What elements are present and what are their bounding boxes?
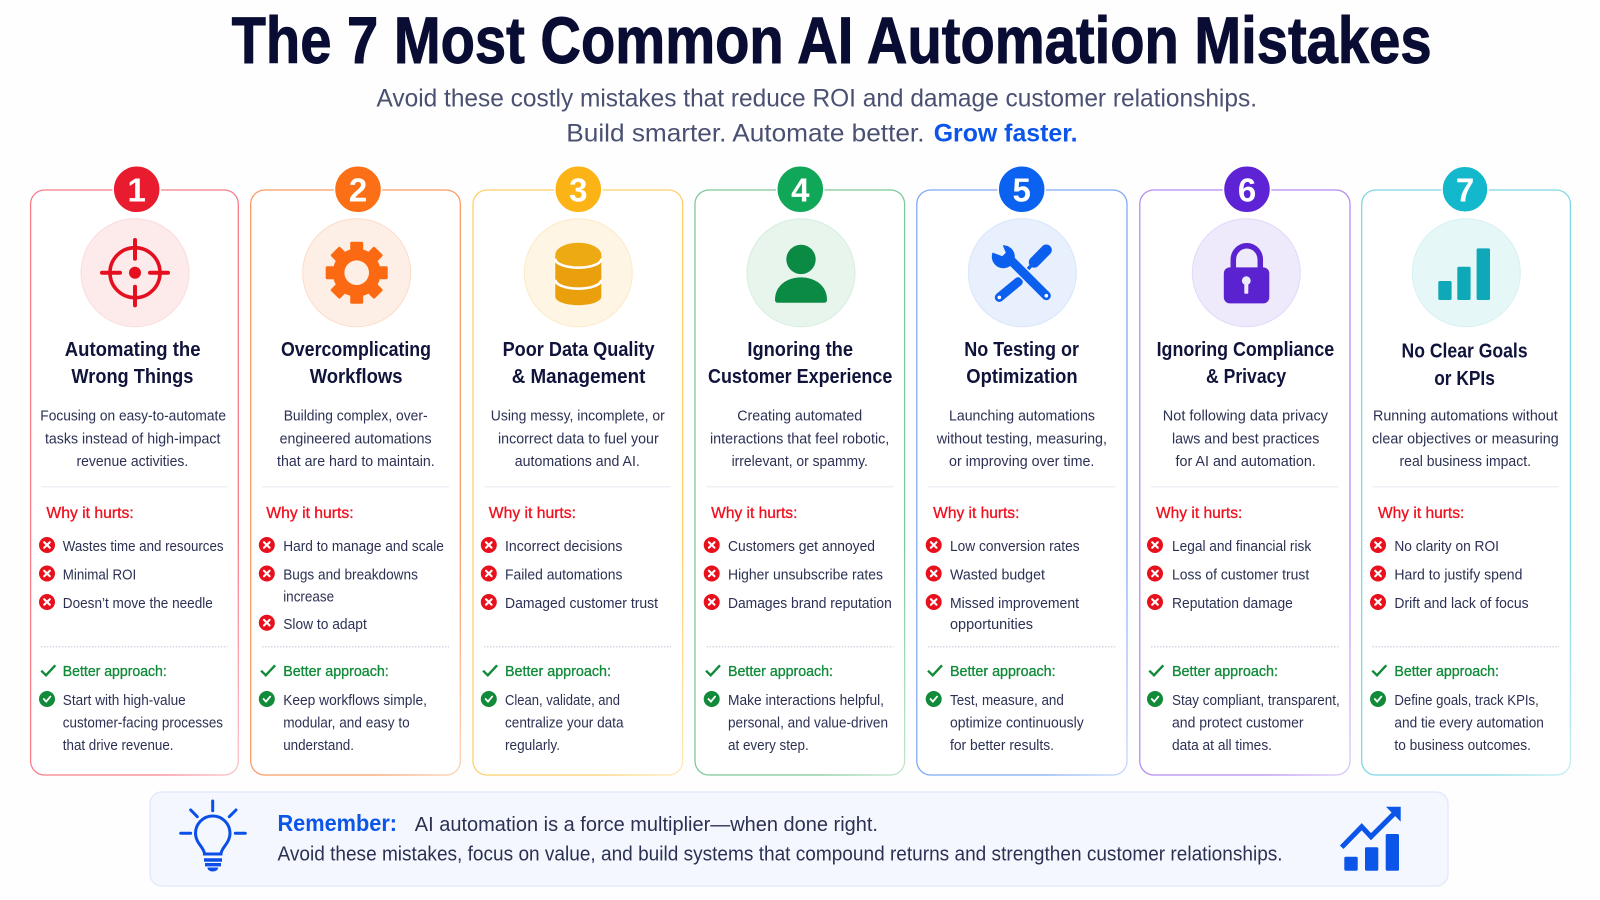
panel: card 2 overcomplicating workflows <box>251 166 460 775</box>
better approach: understand. <box>283 738 354 754</box>
panel: card 7 no clear goals or KPIs <box>1362 166 1570 775</box>
card title: Automating the <box>65 338 200 361</box>
why it hurts list: Loss of customer trust <box>1172 567 1309 583</box>
why it hurts list: No clarity on ROI <box>1394 539 1499 555</box>
subtitle: Avoid these costly mistakes that reduce ROI and damage customer relationships. <box>376 85 1257 113</box>
card border <box>917 190 1127 775</box>
number badge 2 <box>334 166 382 213</box>
panel: card 1 automating the wrong things <box>31 166 238 775</box>
panel: card 4 ignoring the customer experience <box>695 166 905 775</box>
better approach: Better approach: <box>1394 664 1499 680</box>
icon: light bulb <box>181 801 245 872</box>
number badge 6 <box>1224 166 1270 213</box>
icon: bar chart <box>1412 219 1520 327</box>
number badge 3 <box>555 166 602 213</box>
better approach: optimize continuously <box>950 716 1084 732</box>
card title: No Testing or <box>964 338 1079 361</box>
subtitle <box>376 85 1257 147</box>
description: revenue activities. <box>76 454 188 470</box>
card title: Workflows <box>310 365 402 388</box>
icon: gear <box>303 219 411 327</box>
description: tasks instead of high-impact <box>45 431 220 447</box>
better approach: data at all times. <box>1172 738 1272 754</box>
card title <box>281 338 431 388</box>
card title: Poor Data Quality <box>503 338 655 361</box>
description: Using messy, incomplete, or <box>491 409 665 425</box>
description: Focusing on easy-to-automate <box>40 409 226 425</box>
why it hurts list <box>926 505 1080 633</box>
card border <box>473 190 683 775</box>
icon: wrench and screwdriver <box>968 219 1076 327</box>
why it hurts list <box>39 505 224 612</box>
why it hurts list <box>1370 505 1529 612</box>
why it hurts list: Hard to manage and scale <box>283 539 444 555</box>
card border <box>251 190 460 775</box>
description: for AI and automation. <box>1176 454 1316 470</box>
why it hurts list <box>1147 505 1312 612</box>
card title: Ignoring the <box>747 338 853 361</box>
better approach: centralize your data <box>505 716 624 732</box>
why it hurts list: opportunities <box>950 617 1033 633</box>
why it hurts list: Wastes time and resources <box>63 539 223 555</box>
description: without testing, measuring, <box>936 431 1107 447</box>
panel: remember callout <box>150 792 1448 886</box>
title: The 7 Most Common AI Automation Mistakes <box>232 3 1432 77</box>
why it hurts list: Bugs and breakdowns <box>283 567 418 583</box>
why it hurts list: Why it hurts: <box>933 505 1019 522</box>
description <box>710 409 889 470</box>
card title: & Privacy <box>1206 365 1287 388</box>
why it hurts list: Drift and lack of focus <box>1394 596 1529 612</box>
why it hurts list: Slow to adapt <box>283 617 367 633</box>
card title: & Management <box>512 365 646 388</box>
panel: card 3 poor data quality <box>473 166 683 775</box>
description <box>491 409 665 470</box>
number badge 7: 7 <box>1456 171 1474 208</box>
description <box>936 409 1107 470</box>
why it hurts list: Damaged customer trust <box>505 596 658 612</box>
why it hurts list: Why it hurts: <box>1156 505 1242 522</box>
number badge 4 <box>777 166 824 213</box>
description: Running automations without <box>1373 409 1558 425</box>
card title <box>708 338 892 388</box>
subtitle: Grow faster. <box>934 119 1078 147</box>
better approach <box>481 664 624 754</box>
icon: growth chart <box>1342 807 1401 871</box>
card border <box>695 190 905 775</box>
better approach: Better approach: <box>1172 664 1278 680</box>
remember text: Avoid these mistakes, focus on value, and build systems that compound returns and strengthen customer relationships. <box>278 844 1283 866</box>
better approach <box>1370 664 1544 754</box>
description: Building complex, over- <box>284 409 428 425</box>
better approach: customer-facing processes <box>63 716 223 732</box>
better approach: regularly. <box>505 738 560 754</box>
description <box>40 409 226 470</box>
why it hurts list: Why it hurts: <box>46 505 134 522</box>
number badge 1 <box>113 166 160 213</box>
better approach: Keep workflows simple, <box>283 693 427 709</box>
why it hurts list: Why it hurts: <box>1378 505 1464 522</box>
card border <box>1362 190 1570 775</box>
why it hurts list: Wasted budget <box>950 567 1045 583</box>
card title <box>964 338 1079 388</box>
better approach: to business outcomes. <box>1394 738 1531 754</box>
why it hurts list: Failed automations <box>505 567 622 583</box>
panel: card 5 no testing or optimization <box>917 166 1127 775</box>
why it hurts list: Why it hurts: <box>266 505 354 522</box>
number badge 5 <box>998 166 1045 213</box>
number badge 6: 6 <box>1238 171 1256 208</box>
better approach <box>704 664 888 754</box>
number badge 7 <box>1442 166 1488 212</box>
why it hurts list: increase <box>283 590 334 606</box>
card title: Overcomplicating <box>281 338 431 361</box>
why it hurts list <box>259 505 444 633</box>
description <box>1372 409 1559 470</box>
description: or improving over time. <box>949 454 1094 470</box>
card title: Wrong Things <box>71 365 193 388</box>
card title <box>503 338 655 388</box>
card title: or KPIs <box>1434 367 1495 390</box>
card title: Ignoring Compliance <box>1157 338 1334 361</box>
why it hurts list: Why it hurts: <box>489 505 576 522</box>
card title: No Clear Goals <box>1402 340 1528 363</box>
why it hurts list: Missed improvement <box>950 596 1079 612</box>
better approach <box>1147 664 1340 754</box>
description: Not following data privacy <box>1163 409 1329 425</box>
why it hurts list <box>704 505 892 612</box>
better approach <box>259 664 427 754</box>
card title: Customer Experience <box>708 365 892 388</box>
why it hurts list: Customers get annoyed <box>728 539 875 555</box>
better approach: Make interactions helpful, <box>728 693 884 709</box>
better approach: and tie every automation <box>1394 716 1544 732</box>
description: that are hard to maintain. <box>277 454 435 470</box>
description: clear objectives or measuring <box>1372 431 1559 447</box>
better approach: Better approach: <box>283 664 389 680</box>
better approach: that drive revenue. <box>63 738 173 754</box>
description <box>1163 409 1329 470</box>
why it hurts list: Why it hurts: <box>711 505 797 522</box>
better approach: and protect customer <box>1172 716 1304 732</box>
description: Creating automated <box>737 409 862 425</box>
better approach: Better approach: <box>505 664 611 680</box>
better approach: Clean, validate, and <box>505 693 620 709</box>
card title <box>1157 338 1334 388</box>
better approach: Better approach: <box>63 664 167 680</box>
panel: card 6 ignoring compliance and privacy <box>1140 166 1350 775</box>
number badge 4: 4 <box>791 171 810 208</box>
icon: database <box>524 219 632 327</box>
description: interactions that feel robotic, <box>710 431 889 447</box>
better approach: Stay compliant, transparent, <box>1172 693 1340 709</box>
better approach: Define goals, track KPIs, <box>1394 693 1539 709</box>
subtitle: Build smarter. Automate better. <box>566 119 924 147</box>
better approach: Better approach: <box>950 664 1056 680</box>
better approach <box>926 664 1084 754</box>
better approach: Better approach: <box>728 664 833 680</box>
number badge 2: 2 <box>349 171 367 208</box>
card title: Optimization <box>966 365 1078 388</box>
why it hurts list: Hard to justify spend <box>1394 567 1522 583</box>
why it hurts list: Incorrect decisions <box>505 539 622 555</box>
description: Launching automations <box>949 409 1095 425</box>
description: irrelevant, or spammy. <box>732 454 868 470</box>
better approach: Test, measure, and <box>950 693 1064 709</box>
why it hurts list: Reputation damage <box>1172 596 1293 612</box>
card border <box>31 190 238 775</box>
icon: target <box>81 219 189 327</box>
why it hurts list: Doesn’t move the needle <box>63 596 213 612</box>
why it hurts list: Damages brand reputation <box>728 596 892 612</box>
why it hurts list: Minimal ROI <box>63 567 136 583</box>
number badge 5: 5 <box>1013 171 1031 208</box>
remember text <box>278 810 1283 866</box>
better approach: modular, and easy to <box>283 716 410 732</box>
why it hurts list: Low conversion rates <box>950 539 1080 555</box>
description: incorrect data to fuel your <box>498 431 659 447</box>
description: laws and best practices <box>1172 431 1319 447</box>
description: automations and AI. <box>515 454 640 470</box>
card title <box>1402 340 1528 390</box>
icon: padlock <box>1192 219 1300 327</box>
description <box>277 409 435 470</box>
better approach: for better results. <box>950 738 1054 754</box>
description: engineered automations <box>280 431 432 447</box>
better approach: Start with high-value <box>63 693 186 709</box>
remember text: Remember: <box>278 810 397 836</box>
better approach: personal, and value-driven <box>728 716 888 732</box>
description: real business impact. <box>1400 454 1531 470</box>
number badge 1: 1 <box>128 171 146 208</box>
number badge 3: 3 <box>569 171 587 208</box>
better approach <box>39 664 223 754</box>
card title <box>65 338 200 388</box>
better approach: at every step. <box>728 738 809 754</box>
remember text: AI automation is a force multiplier—when done right. <box>415 814 878 836</box>
icon: person <box>747 219 855 327</box>
why it hurts list <box>481 505 658 612</box>
why it hurts list: Legal and financial risk <box>1172 539 1312 555</box>
card border <box>1140 190 1350 775</box>
why it hurts list: Higher unsubscribe rates <box>728 567 883 583</box>
